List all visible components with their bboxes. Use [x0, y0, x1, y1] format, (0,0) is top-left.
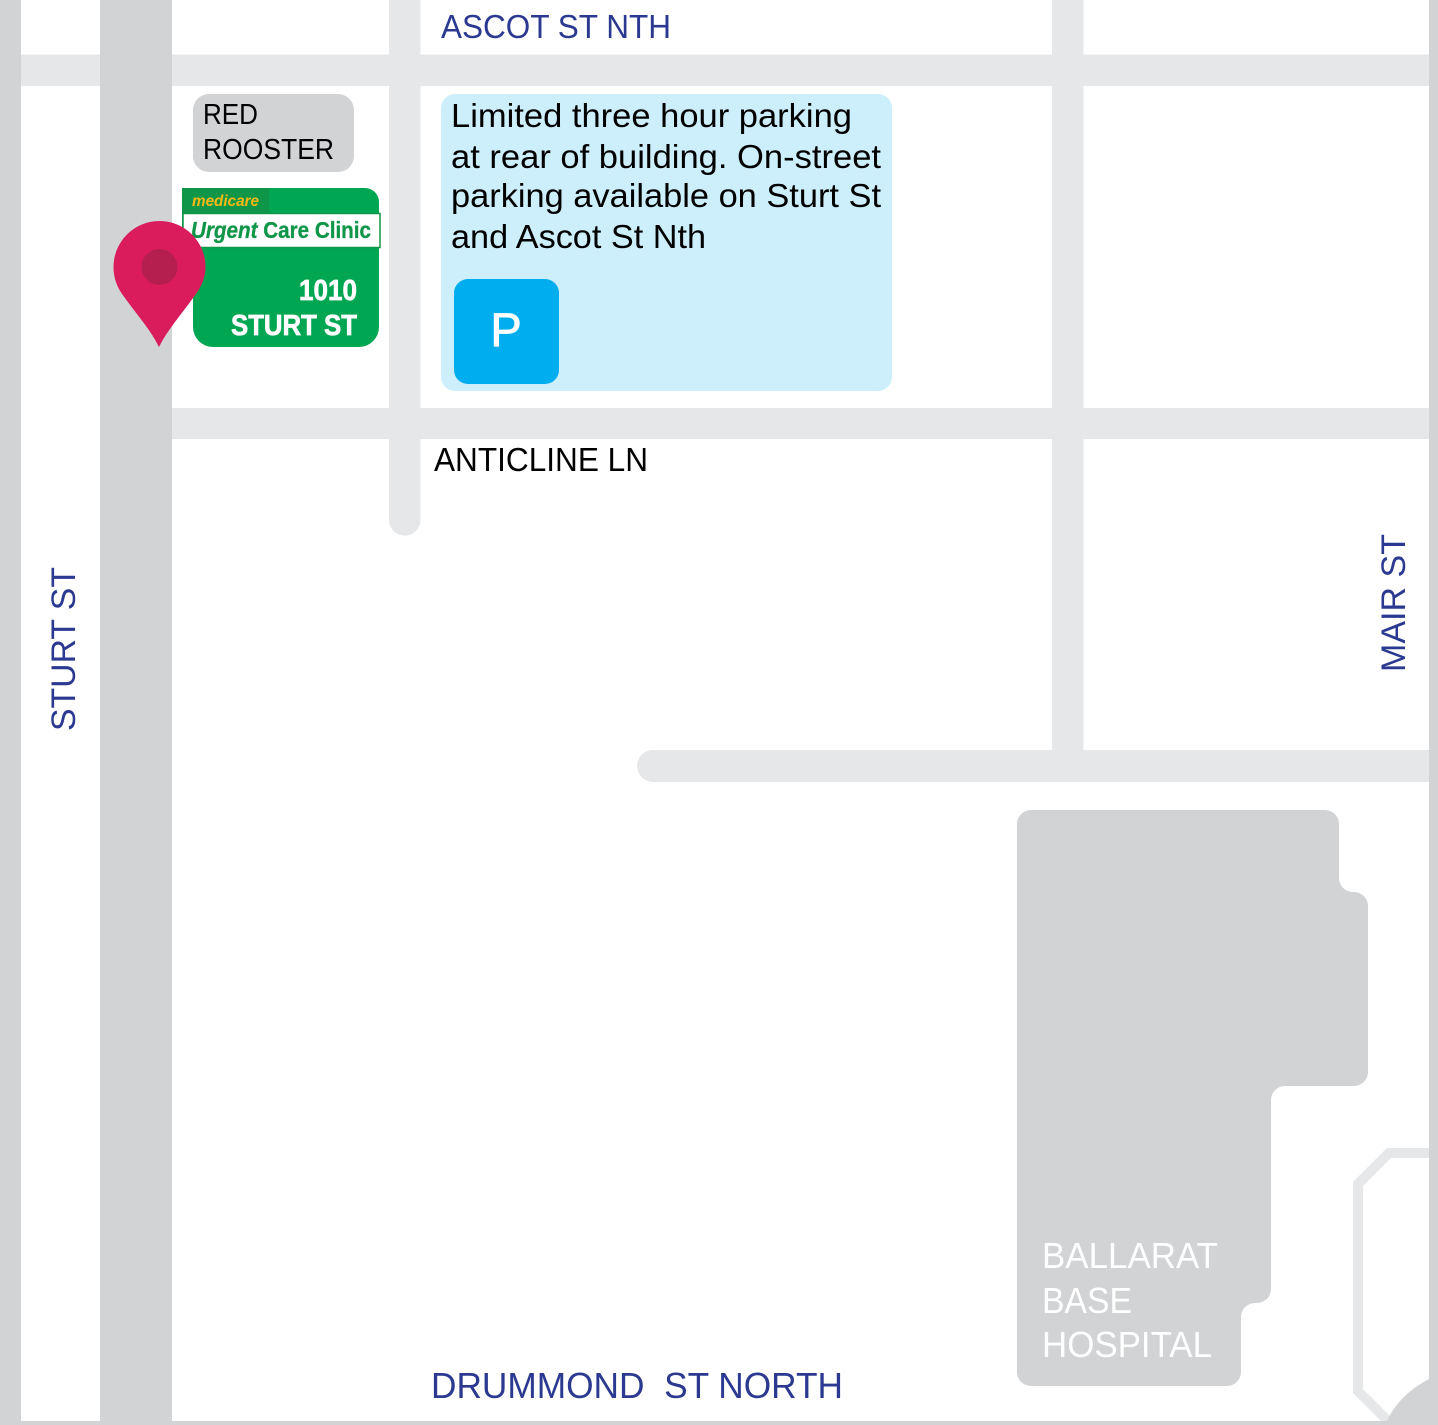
- icon: parking: [454, 279, 559, 384]
- label: Sturt St: STURT ST: [45, 567, 83, 731]
- road: hospital loop: [1358, 1153, 1429, 1423]
- panel: parking information: at rear of building. On-street: [451, 138, 881, 175]
- road: vertical lane: [389, 0, 420, 536]
- road: Sturt St: [100, 0, 172, 1425]
- panel: parking information: [441, 94, 892, 391]
- building: Ballarat Base Hospital: [1017, 810, 1368, 1386]
- panel: parking information: and Ascot St Nth: [451, 218, 706, 255]
- map corner shape: [1387, 1379, 1429, 1421]
- building: Ballarat Base Hospital: BASE: [1042, 1280, 1132, 1321]
- label: Anticline Ln: ANTICLINE LN: [434, 441, 648, 478]
- panel: Medicare Urgent Care Clinic: Urgent Care Clinic: [191, 217, 371, 243]
- icon: parking: P: [490, 303, 522, 356]
- building: Ballarat Base Hospital: HOSPITAL: [1042, 1324, 1212, 1365]
- panel: Medicare Urgent Care Clinic: STURT ST: [231, 310, 357, 342]
- panel: parking information: Limited three hour parking: [451, 97, 852, 134]
- panel: Medicare Urgent Care Clinic: medicare: [192, 193, 259, 210]
- road: Mair St connector: [1052, 0, 1084, 752]
- panel: Medicare Urgent Care Clinic: [182, 188, 380, 347]
- label: Ascot St Nth: ASCOT ST NTH: [441, 8, 671, 45]
- building: Ballarat Base Hospital: BALLARAT: [1042, 1235, 1218, 1276]
- road: Drummond St connector: [637, 750, 1429, 782]
- panel: parking information: parking available on Sturt St: [451, 177, 881, 214]
- panel: Red Rooster: RED: [203, 99, 258, 131]
- panel: Medicare Urgent Care Clinic: 1010: [299, 275, 357, 307]
- road: Anticline Ln: [172, 408, 1429, 439]
- panel: Red Rooster: [193, 94, 354, 172]
- panel: Red Rooster: ROOSTER: [203, 134, 334, 166]
- road: Ascot St Nth: [21, 54, 1429, 86]
- label: Drummond St North: DRUMMOND ST NORTH: [431, 1365, 843, 1406]
- label: Mair St: MAIR ST: [1375, 534, 1413, 672]
- icon: location pin: [114, 221, 206, 347]
